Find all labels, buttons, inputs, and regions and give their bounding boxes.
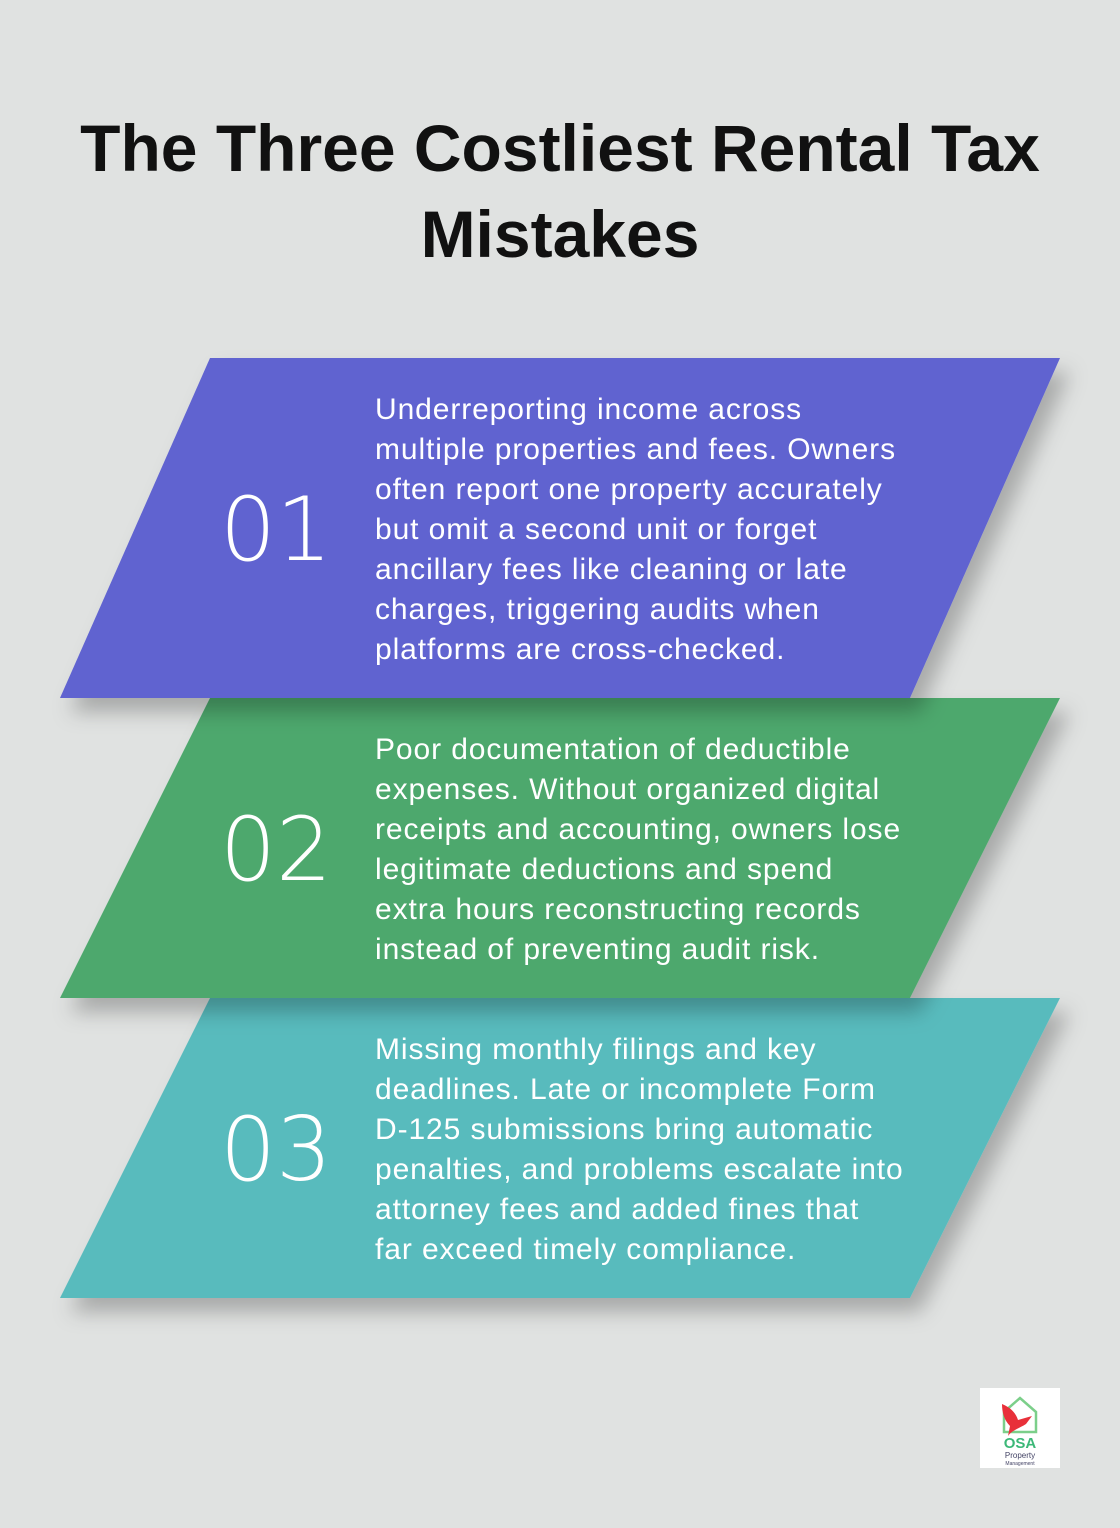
panel 1 text: but omit a second unit or forget: [375, 513, 817, 546]
panel 1 text: ancillary fees like cleaning or late: [375, 553, 848, 586]
panel 1 text: [375, 393, 896, 666]
title: The Three Costliest Rental Tax: [80, 111, 1040, 185]
panel 3 text: deadlines. Late or incomplete Form: [375, 1073, 876, 1106]
panel 2 text: Poor documentation of deductible: [375, 733, 851, 766]
panel 2 text: extra hours reconstructing records: [375, 893, 861, 926]
logo: Management: [1005, 1461, 1035, 1467]
logo: [980, 1388, 1060, 1468]
panel 3 text: far exceed timely compliance.: [375, 1233, 796, 1266]
panel 2 text: instead of preventing audit risk.: [375, 933, 820, 966]
panel 1 text: charges, triggering audits when: [375, 593, 820, 626]
panel 1 text: multiple properties and fees. Owners: [375, 433, 896, 466]
panel 3 text: [375, 1033, 904, 1266]
panel 2 text: receipts and accounting, owners lose: [375, 813, 901, 846]
panel 3 number: 03: [220, 1098, 332, 1201]
panel 2 shape: [60, 698, 1060, 998]
panel 1 text: often report one property accurately: [375, 473, 883, 506]
panel 2 text: legitimate deductions and spend: [375, 853, 833, 886]
panel 3 text: D-125 submissions bring automatic: [375, 1113, 873, 1146]
title: Mistakes: [421, 197, 699, 271]
logo: Property: [1005, 1451, 1035, 1460]
panel 2 text: expenses. Without organized digital: [375, 773, 880, 806]
panel 1 text: platforms are cross-checked.: [375, 633, 785, 666]
panel 2 number: 02: [220, 798, 332, 901]
panel 2 text: [375, 733, 901, 966]
panel 3 text: penalties, and problems escalate into: [375, 1153, 904, 1186]
panel 1 number: 01: [220, 478, 332, 581]
title: [80, 111, 1040, 271]
panel 1 shape: [60, 358, 1060, 698]
logo: OSA: [1004, 1435, 1036, 1452]
panel 3 shape: [60, 998, 1060, 1298]
panel 3 text: attorney fees and added fines that: [375, 1193, 859, 1226]
panel 3 text: Missing monthly filings and key: [375, 1033, 816, 1066]
panel 1 text: Underreporting income across: [375, 393, 802, 426]
